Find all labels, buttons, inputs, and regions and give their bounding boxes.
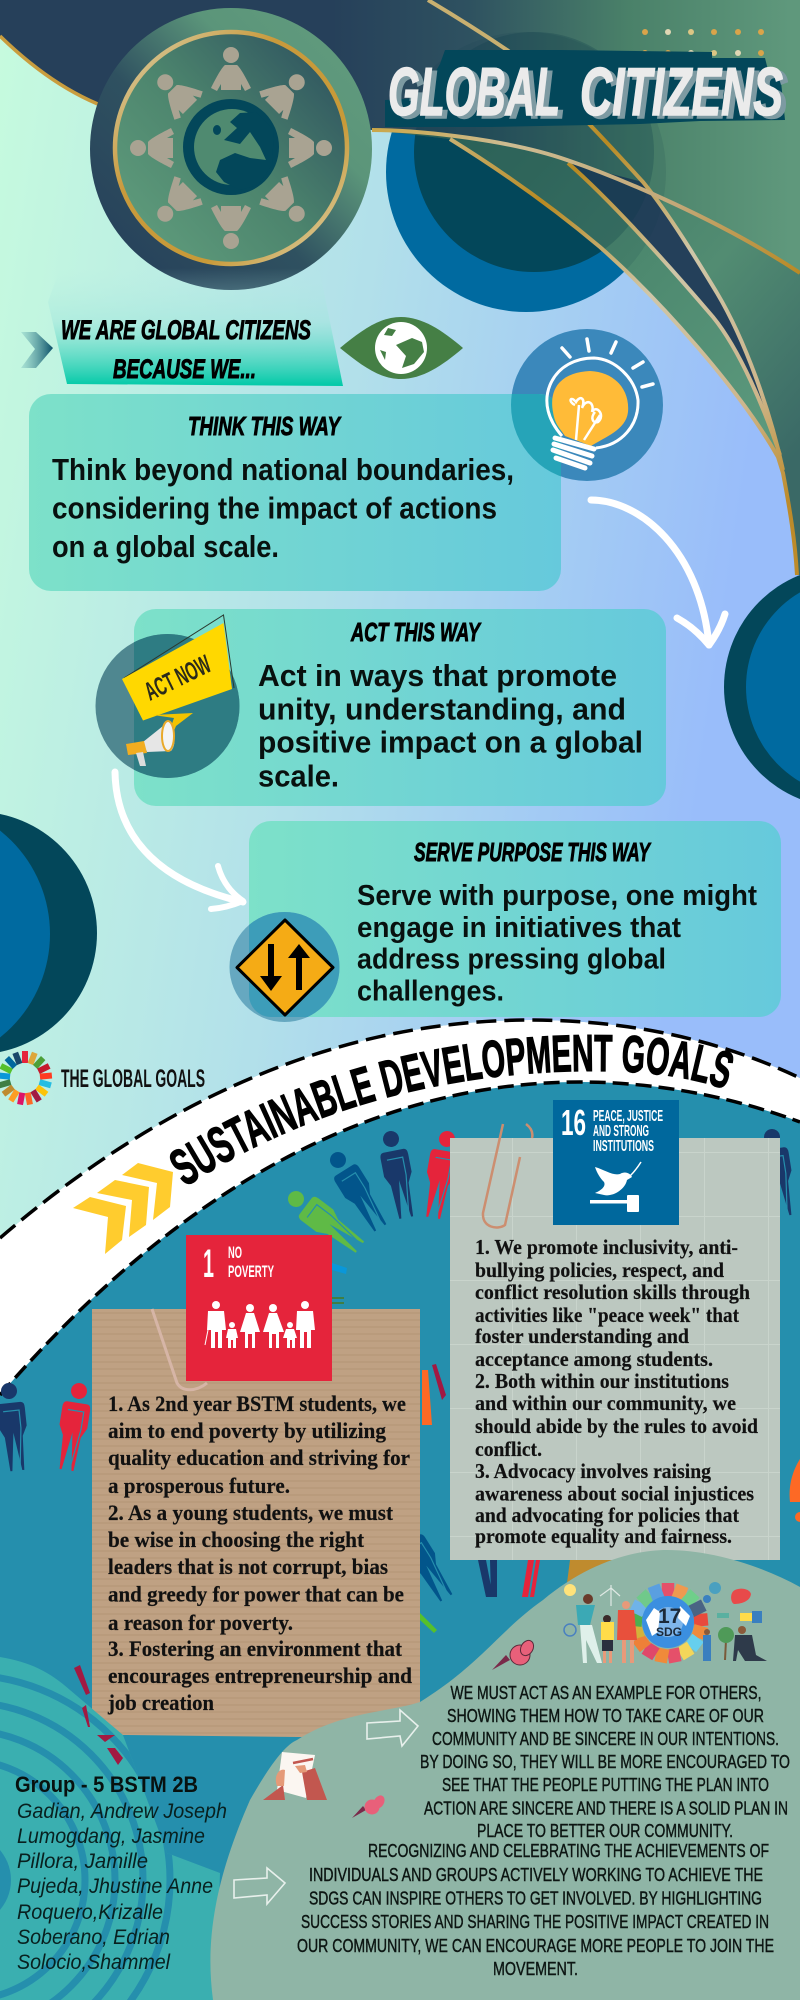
curved white ribbon — [0, 1020, 800, 1395]
illustration: 17 SDG group — [564, 1582, 767, 1663]
teal lower section — [0, 1020, 800, 2000]
icon: SDG 16 peace justice: AND STRONG — [593, 1123, 649, 1140]
icon: globe eye — [340, 317, 463, 379]
group credits: Gadian, Andrew Joseph — [17, 1800, 227, 1823]
icon: light bulb — [511, 329, 663, 481]
heading tag: we are global citizens because we — [48, 268, 343, 386]
decorative blue circle top — [386, 32, 666, 312]
title: global citizens — [385, 50, 788, 133]
panel: serve purpose this way: SERVE PURPOSE THIS WAY — [414, 837, 652, 867]
paperclip — [152, 1309, 207, 1390]
icon: push pin lower — [352, 1793, 387, 1818]
icon: SDG 16 peace justice: 16 — [561, 1102, 586, 1143]
icon: SDG 1 no poverty: NO — [228, 1243, 242, 1262]
panel: think this way: Think beyond national boundaries, — [52, 452, 514, 487]
panel: no poverty cardboard note: and greedy for power that can be — [108, 1582, 404, 1606]
panel: serve purpose this way — [249, 821, 781, 1017]
text block: we must act as an example: MOVEMENT. — [493, 1959, 578, 1979]
icon: SDG 16 peace justice: INSTITUTIONS — [593, 1138, 654, 1155]
panel: no poverty cardboard note: quality education and striving for — [108, 1445, 410, 1470]
group credits: Group - 5 BSTM 2B — [15, 1772, 198, 1797]
human figures ring — [0, 1127, 800, 1633]
text block: we must act as an example — [297, 1683, 790, 1979]
crimson figure fragments — [74, 1665, 123, 1765]
icon: chevron — [21, 332, 53, 368]
arrow: outline top — [367, 1710, 418, 1746]
bulb drawing — [547, 339, 653, 468]
panel: think this way: on a global scale. — [52, 529, 279, 564]
panel: no poverty cardboard note: a prosperous future. — [108, 1473, 290, 1498]
panel: no poverty cardboard note: 3. Fostering an environment that — [108, 1636, 402, 1661]
panel: act this way — [134, 609, 666, 806]
panel: no poverty cardboard note: 1. As 2nd year BSTM students, we — [108, 1391, 406, 1416]
panel: act this way: Act in ways that promote — [258, 658, 617, 693]
panel: no poverty cardboard note: encourages entrepreneurship and — [108, 1663, 412, 1688]
panel: peace justice note: conflict. — [475, 1437, 542, 1461]
panel: peace justice note: activities like "peace week" that — [475, 1303, 740, 1327]
group credits: Pujeda, Jhustine Anne — [17, 1875, 213, 1898]
panel: peace justice note: 3. Advocacy involves raising — [475, 1459, 711, 1483]
arrow: think to act — [591, 500, 725, 645]
panel: peace justice note — [450, 1124, 780, 1560]
panel: no poverty cardboard note — [92, 1309, 420, 1737]
group credits — [15, 1772, 227, 1974]
panel: think this way — [29, 394, 561, 591]
panel: think this way: THINK THIS WAY — [188, 411, 342, 441]
concentric teal shape — [0, 1650, 230, 2000]
panel: act this way: scale. — [258, 758, 339, 794]
panel: peace justice note: promote equality and fairness. — [475, 1524, 732, 1548]
panel: act this way: ACT THIS WAY — [350, 617, 482, 647]
panel: serve purpose this way: address pressing global — [357, 944, 666, 976]
icon: SDG 1 no poverty: POVERTY — [228, 1262, 274, 1281]
panel: act this way: positive impact on a global — [258, 724, 643, 760]
heading tag: we are global citizens because we: BECAUSE WE... — [113, 354, 256, 384]
decorative blue circle left — [0, 802, 97, 1066]
panel: peace justice note: conflict resolution skills through — [475, 1280, 750, 1304]
text block: we must act as an example: PLACE TO BETTER OUR COMMUNITY. — [477, 1821, 733, 1841]
icon: act now megaphone: ACT NOW — [139, 649, 216, 706]
heading tag: we are global citizens because we: WE ARE GLOBAL CITIZENS — [61, 315, 311, 345]
group credits: Soberano, Edrian — [17, 1926, 170, 1949]
icon: two-way road sign — [230, 912, 340, 1022]
decorative blue circle right — [724, 566, 800, 808]
panel: peace justice note: awareness about social injustices — [475, 1482, 754, 1506]
arrow: act to serve — [115, 772, 243, 909]
panel: no poverty cardboard note: 2. As a young students, we must — [108, 1500, 393, 1525]
panel: peace justice note: bullying policies, respect, and — [475, 1258, 724, 1282]
panel: no poverty cardboard note: job creation — [107, 1690, 214, 1715]
panel: no poverty cardboard note: leaders that is not corrupt, bias — [108, 1554, 388, 1579]
icon: SDG 1 no poverty — [186, 1235, 332, 1381]
illustration: 17 SDG group: 17 — [658, 1605, 681, 1628]
panel: no poverty cardboard note: aim to end poverty by utilizing — [108, 1418, 387, 1443]
speech blob — [210, 1550, 800, 2000]
icon: SDG 16 peace justice — [553, 1100, 679, 1225]
illustration: 17 SDG group: SDG — [656, 1625, 682, 1639]
decorative dots — [642, 29, 764, 56]
group credits: Solocio,Shammel — [17, 1951, 171, 1974]
panel: act this way: unity, understanding, and — [258, 692, 626, 726]
logo: the global goals — [0, 1051, 205, 1105]
logo: the global goals: THE GLOBAL GOALS — [61, 1065, 205, 1093]
icon: SDG 1 no poverty: 1 — [203, 1242, 214, 1286]
icon: people around the globe — [90, 8, 372, 290]
icon: hands writing — [263, 1752, 327, 1800]
panel: peace justice note: 1. We promote inclusivity, anti- — [475, 1235, 738, 1259]
group credits: Roquero,Krizalle — [17, 1901, 163, 1924]
panel: no poverty cardboard note: be wise in choosing the right — [108, 1527, 364, 1552]
panel: serve purpose this way: Serve with purpose, one might — [357, 880, 757, 912]
icon: SDG 16 peace justice: PEACE, JUSTICE — [593, 1108, 663, 1125]
heading: sustainable development goals: SUSTAINABLE DEVELOPMENT GOALS — [170, 1034, 734, 1184]
group credits: Pillora, Jamille — [17, 1850, 148, 1873]
panel: peace justice note: and within our community, we — [475, 1391, 736, 1415]
icon: push pin top — [492, 1638, 536, 1670]
panel: think this way: considering the impact of actions — [52, 490, 497, 526]
panel: no poverty cardboard note: a reason for poverty. — [108, 1610, 293, 1635]
icon: yellow chevrons — [73, 1163, 173, 1254]
icon: act now megaphone — [96, 615, 240, 778]
panel: peace justice note: should abide by the rules to avoid — [475, 1414, 758, 1438]
panel: peace justice note: acceptance among students. — [475, 1347, 713, 1371]
paperclip — [483, 1124, 532, 1227]
title: global citizens: GLOBAL — [393, 57, 565, 133]
panel: peace justice note: and advocating for policies that — [475, 1503, 740, 1527]
top swoosh band — [0, 0, 800, 575]
panel: peace justice note: 2. Both within our institutions — [475, 1369, 729, 1393]
panel: serve purpose this way: engage in initiatives that — [357, 912, 681, 944]
group credits: Lumogdang, Jasmine — [17, 1825, 205, 1848]
arrow: outline bottom — [234, 1868, 285, 1904]
panel: serve purpose this way: challenges. — [357, 976, 504, 1008]
panel: peace justice note: foster understanding and — [475, 1324, 689, 1348]
title: global citizens: GLOBAL — [388, 54, 560, 130]
